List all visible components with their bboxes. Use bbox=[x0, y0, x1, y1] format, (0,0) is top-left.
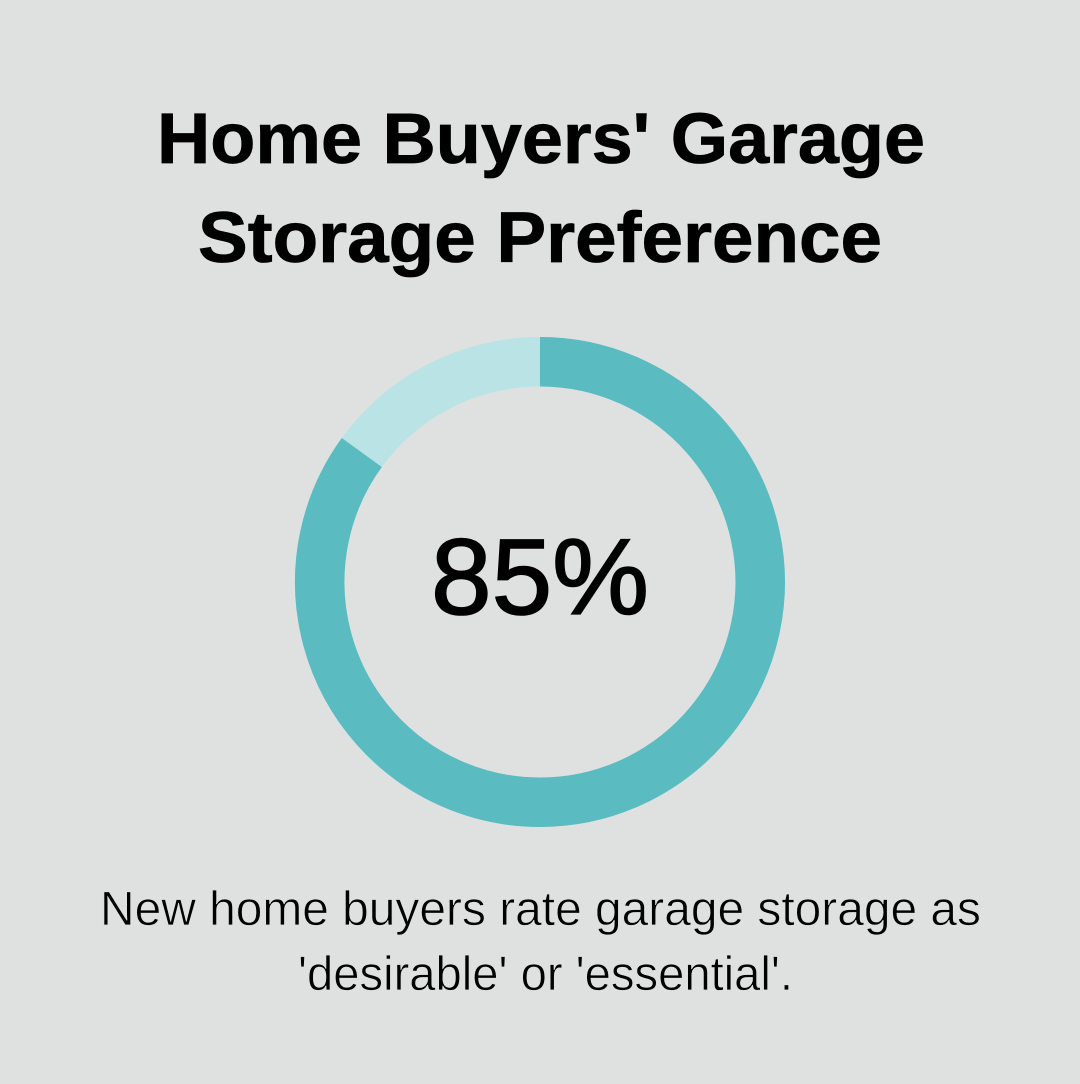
donut value: 85% bbox=[431, 516, 649, 637]
donut chart: 85 percent bbox=[320, 362, 760, 802]
title: Home Buyers' Garage bbox=[157, 100, 925, 179]
caption bbox=[100, 883, 981, 1001]
title bbox=[157, 100, 925, 278]
caption: New home buyers rate garage storage as bbox=[100, 883, 981, 936]
title: Storage Preference bbox=[198, 199, 882, 278]
caption: 'desirable' or 'essential'. bbox=[298, 948, 793, 1001]
